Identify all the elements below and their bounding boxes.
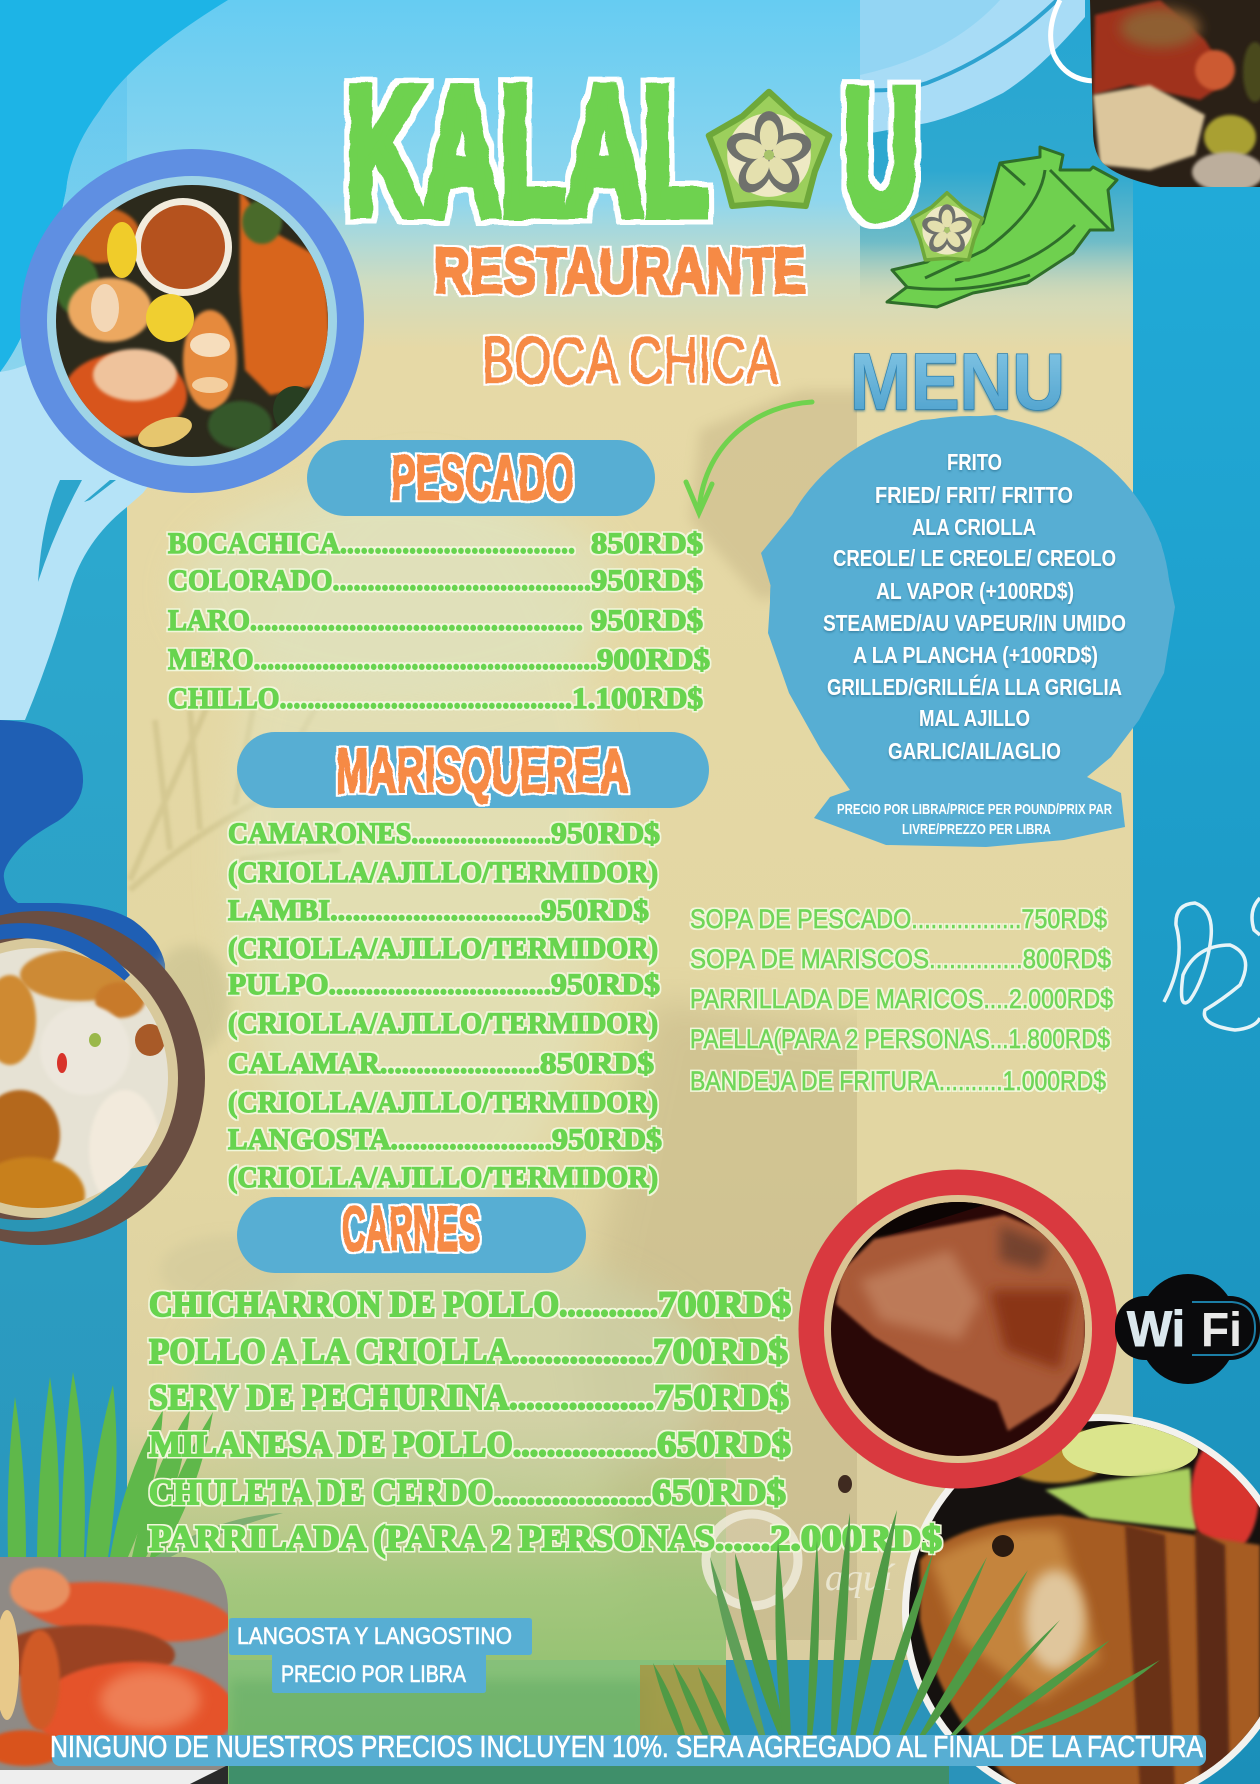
- decoration: white squiggle right: [1164, 898, 1260, 1030]
- price rows: [168, 527, 710, 715]
- price rows: CHULETA DE CERDO...................: [149, 1472, 652, 1512]
- price rows: MILANESA DE POLLO.................: [149, 1424, 657, 1464]
- cooking style lines: ALA CRIOLLA: [912, 514, 1036, 540]
- cooking style lines: GARLIC/AIL/AGLIO: [888, 738, 1061, 764]
- callout: lobster price per pound: LANGOSTA Y LANGOSTINO: [237, 1623, 512, 1650]
- decoration: white squiggle top right: [1051, 0, 1094, 81]
- price rows: LARO...............................................: [168, 604, 583, 637]
- price rows: 2.000RD$: [770, 1518, 942, 1558]
- price rows: 850RD$: [540, 1047, 654, 1080]
- heading: RESTAURANTE: RESTAURANTE: [434, 235, 806, 307]
- icon: wifi: Wi: [1127, 1301, 1185, 1357]
- logo watermark: [706, 1514, 896, 1606]
- price rows: [149, 1284, 942, 1558]
- icon: okra pods: [887, 147, 1117, 307]
- price rows: 900RD$: [597, 643, 710, 676]
- panel: soups and specials: SOPA DE MARISCOS..............800RD$: [690, 944, 1111, 974]
- photo: top right seafood: [1090, 0, 1260, 192]
- photo: lobster plate bottom left: [0, 1557, 235, 1784]
- panel: carnes: [149, 1195, 942, 1558]
- price rows: SERV DE PECHURINA.................: [149, 1377, 654, 1417]
- cooking style lines: MAL AJILLO: [919, 705, 1030, 731]
- panel: soups and specials: BANDEJA DE FRITURA..........1.000RD$: [690, 1066, 1106, 1096]
- photo circle: lobster platter: [20, 149, 364, 493]
- panel: soups and specials: SOPA DE PESCADO.................750RD$: [690, 904, 1107, 934]
- price rows: CHILLO..........................................: [168, 682, 572, 715]
- panel: pescado: [168, 440, 710, 715]
- cooking style lines: [823, 449, 1126, 764]
- price rows: 700RD$: [653, 1331, 788, 1371]
- photo circle: grilled meat: [798, 1170, 1118, 1488]
- price rows: 700RD$: [658, 1284, 791, 1324]
- peppercorn: [838, 1475, 852, 1493]
- price rows: CHICHARRON DE POLLO............: [149, 1284, 658, 1324]
- cooking style lines: FRIED/ FRIT/ FRITTO: [875, 482, 1073, 508]
- price rows: 950RD$: [591, 604, 703, 637]
- price rows: 750RD$: [654, 1377, 789, 1417]
- title: KALALOU: KALAL: [346, 51, 708, 252]
- cooking style lines: CREOLE/ LE CREOLE/ CREOLO: [833, 545, 1116, 571]
- price rows: (CRIOLLA/AJILLO/TERMIDOR): [228, 1086, 658, 1119]
- panel: soups and specials: PARRILLADA DE MARICOS....2.000RD$: [690, 984, 1113, 1014]
- price rows: LAMBI............................: [228, 894, 541, 927]
- heading: BOCA CHICA: BOCA CHICA: [482, 323, 778, 397]
- palm: left fan: [8, 1372, 283, 1560]
- price rows: 1.100RD$: [572, 682, 703, 715]
- price rows: (CRIOLLA/AJILLO/TERMIDOR): [228, 1161, 658, 1194]
- cooking style lines: GRILLED/GRILLÉ/A LLA GRIGLIA: [827, 673, 1122, 700]
- price rows: COLORADO.....................................: [168, 564, 591, 597]
- panel: pescado: PESCADO: [391, 444, 574, 513]
- price rows: (CRIOLLA/AJILLO/TERMIDOR): [228, 856, 658, 889]
- price rows: [228, 817, 662, 1194]
- logo watermark: aquí: [825, 1557, 896, 1599]
- price rows: 950RD$: [551, 968, 660, 1001]
- panel: carnes: CARNES: [342, 1195, 480, 1264]
- cooking style lines: STEAMED/AU VAPEUR/IN UMIDO: [823, 610, 1126, 636]
- price rows: LANGOSTA......................: [228, 1123, 552, 1156]
- price rows: 950RD$: [552, 1123, 662, 1156]
- price rows: CALAMAR......................: [228, 1047, 540, 1080]
- icon: wifi: [1115, 1274, 1260, 1384]
- panel: soups and specials: [690, 904, 1113, 1096]
- price rows: (CRIOLLA/AJILLO/TERMIDOR): [228, 932, 658, 965]
- callout: lobster price per pound: [229, 1618, 532, 1693]
- price rows: (CRIOLLA/AJILLO/TERMIDOR): [228, 1007, 658, 1040]
- price per pound note: [837, 801, 1112, 838]
- price rows: 950RD$: [541, 894, 649, 927]
- left dark blue blob: [0, 720, 166, 1010]
- title: KALALOU: U: [844, 53, 918, 254]
- panel: marisquerea: MARISQUEREA: [336, 737, 628, 806]
- heading: MENU: MENU: [850, 337, 1065, 426]
- arrow: to fish list: [686, 402, 812, 513]
- price rows: POLLO A LA CRIOLLA.................: [149, 1331, 653, 1371]
- price rows: 650RD$: [657, 1424, 791, 1464]
- heading pill: [237, 732, 709, 808]
- cooking style lines: AL VAPOR (+100RD$): [876, 578, 1074, 604]
- price rows: 950RD$: [591, 564, 703, 597]
- price rows: 650RD$: [652, 1472, 786, 1512]
- photo circle: fried fish plate: [890, 1410, 1260, 1784]
- ground colours: [127, 1420, 726, 1784]
- icon: okra slice as O: [709, 92, 829, 206]
- price rows: BOCACHICA..................................: [168, 527, 575, 560]
- cooking style lines: FRITO: [947, 449, 1002, 475]
- heading pill: [237, 1197, 586, 1273]
- price rows: PARRILADA (PARA 2 PERSONAS......: [149, 1518, 770, 1558]
- price rows: PULPO..............................: [228, 968, 551, 1001]
- watermarks inside panel: [130, 390, 900, 1680]
- heading pill: [307, 440, 655, 516]
- panel: marisquerea: [228, 732, 709, 1194]
- price per pound note: LIVRE/PREZZO PER LIBRA: [902, 821, 1051, 838]
- panel: cooking styles blob: [761, 415, 1175, 847]
- price rows: MERO..................................................: [168, 643, 597, 676]
- price rows: 950RD$: [551, 817, 660, 850]
- price rows: CAMARONES....................: [228, 817, 551, 850]
- cooking style lines: A LA PLANCHA (+100RD$): [853, 642, 1098, 668]
- callout: lobster price per pound: PRECIO POR LIBRA: [281, 1661, 466, 1688]
- palm: centre fan: [653, 1510, 1160, 1738]
- photo circle: fried food: [0, 911, 205, 1245]
- icon: wifi: Fi: [1201, 1304, 1242, 1357]
- price rows: 850RD$: [591, 527, 703, 560]
- panel: soups and specials: PAELLA(PARA 2 PERSONAS...1.800RD$: [690, 1024, 1110, 1054]
- price per pound note: PRECIO POR LIBRA/PRICE PER POUND/PRIX PAR: [837, 801, 1112, 818]
